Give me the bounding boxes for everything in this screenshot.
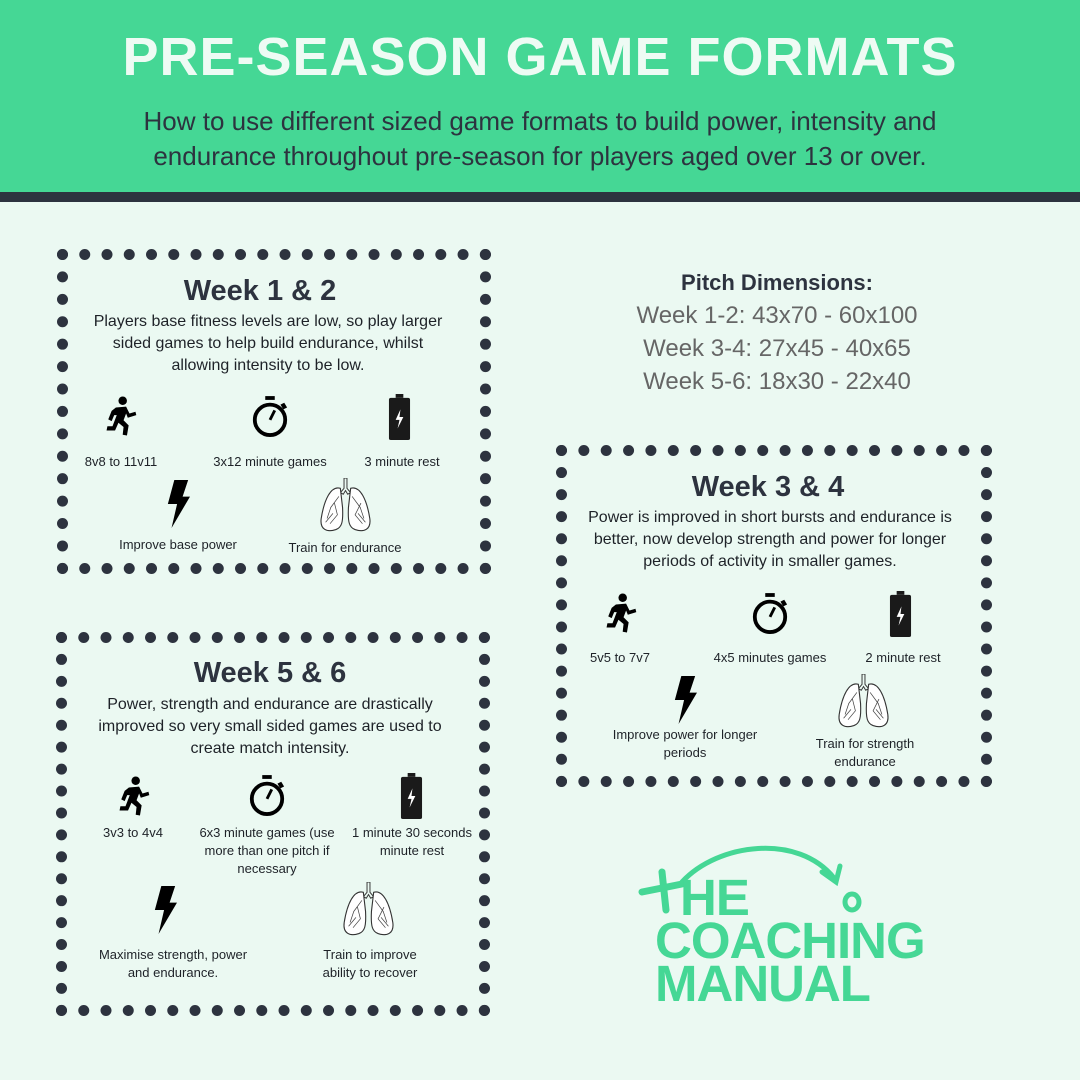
labels row 2: Train for strength — [816, 736, 914, 751]
week 1 & 2 text: allowing intensity to be low. — [171, 357, 364, 374]
logo arrow — [638, 846, 862, 914]
labels row 2: Maximise strength, power — [99, 947, 247, 962]
labels row 2 — [119, 537, 401, 555]
week 3 & 4 text — [588, 509, 952, 570]
icon: bolt — [168, 480, 190, 528]
week 3 & 4 text: Power is improved in short bursts and endurance is — [588, 509, 952, 526]
week 3 & 4 heading: Week 3 & 4 — [692, 471, 844, 503]
labels row 1: 5v5 to 7v7 — [590, 650, 650, 665]
week 5 & 6 text: improved so very small sided games are used to — [98, 718, 442, 735]
icon: bolt — [154, 886, 177, 934]
icon: lungs — [838, 674, 889, 728]
logo text: HE — [680, 869, 749, 926]
labels row 1: 3x12 minute games — [213, 454, 327, 469]
icon: runner — [606, 594, 636, 632]
icon: runner — [120, 776, 150, 816]
icon: battery — [890, 591, 912, 637]
week 1 & 2 text — [94, 313, 442, 374]
labels row 1: 3 minute rest — [364, 454, 440, 469]
panel: week 3 & 4 — [556, 445, 992, 787]
title: PRE-SEASON GAME FORMATS — [122, 27, 958, 87]
logo text: MANUAL — [655, 955, 870, 1012]
icon: stopwatch — [250, 775, 284, 816]
labels row 1: 8v8 to 11v11 — [85, 454, 157, 469]
panel: week 1 & 2 — [57, 249, 491, 574]
labels row 2: Improve base power — [119, 537, 237, 552]
subtitle: endurance throughout pre-season for players aged over 13 or over. — [153, 141, 927, 171]
labels row 1: 1 minute 30 seconds — [352, 825, 472, 840]
pitch dimensions: Week 1-2: 43x70 - 60x100 — [636, 302, 918, 329]
labels row 1: 2 minute rest — [865, 650, 941, 665]
week 1 & 2 heading: Week 1 & 2 — [184, 275, 336, 307]
header banner — [0, 0, 1080, 192]
icon: stopwatch — [752, 593, 788, 634]
pitch dimensions: Week 5-6: 18x30 - 22x40 — [643, 368, 911, 395]
labels row 2: Improve power for longer — [613, 727, 757, 742]
pitch dimensions: Pitch Dimensions: — [681, 270, 873, 295]
labels row 2 — [613, 727, 914, 769]
labels row 1: 4x5 minutes games — [714, 650, 826, 665]
week 1 & 2 text: Players base fitness levels are low, so play larger — [94, 313, 442, 330]
labels row 2: and endurance. — [128, 965, 218, 980]
week 5 & 6 heading: Week 5 & 6 — [194, 657, 346, 689]
icon: runner — [106, 396, 136, 436]
labels row 1: minute rest — [380, 843, 444, 858]
labels row 2: endurance — [834, 754, 896, 769]
labels row 2 — [99, 947, 418, 980]
pitch dimensions: Week 3-4: 27x45 - 40x65 — [643, 335, 911, 362]
labels row 1 — [103, 825, 472, 876]
subtitle: How to use different sized game formats to build power, intensity and — [144, 106, 936, 136]
labels row 2: Train for endurance — [289, 540, 401, 555]
week 5 & 6 text: create match intensity. — [191, 740, 349, 757]
icon: stopwatch — [252, 396, 288, 437]
labels row 2: periods — [664, 745, 706, 760]
subtitle — [144, 106, 936, 171]
pitch dimensions — [636, 270, 918, 395]
labels row 2: Train to improve — [323, 947, 417, 962]
icon: bolt — [674, 676, 697, 724]
icon: battery — [400, 773, 422, 819]
icon: lungs — [343, 882, 394, 936]
week 3 & 4 text: better, now develop strength and power for longer — [594, 531, 946, 548]
labels row 1: 3v3 to 4v4 — [103, 825, 163, 840]
labels row 1: necessary — [237, 861, 297, 876]
panel: week 5 & 6 — [56, 632, 490, 1016]
week 5 & 6 text: Power, strength and endurance are drastically — [107, 696, 433, 713]
labels row 1 — [590, 650, 941, 665]
labels row 1 — [85, 454, 440, 469]
logo text — [655, 869, 925, 1012]
labels row 1: 6x3 minute games (use — [199, 825, 335, 840]
labels row 2: ability to recover — [323, 965, 417, 980]
labels row 1: more than one pitch if — [204, 843, 330, 858]
week 5 & 6 text — [98, 696, 442, 757]
week 1 & 2 text: sided games to help build endurance, whilst — [113, 335, 423, 352]
icon: battery — [388, 394, 410, 440]
logo text: COACHING — [655, 912, 925, 969]
week 3 & 4 text: periods of activity in smaller games. — [643, 553, 897, 570]
logo: the coaching manual — [638, 846, 925, 1012]
icon: lungs — [320, 478, 371, 532]
